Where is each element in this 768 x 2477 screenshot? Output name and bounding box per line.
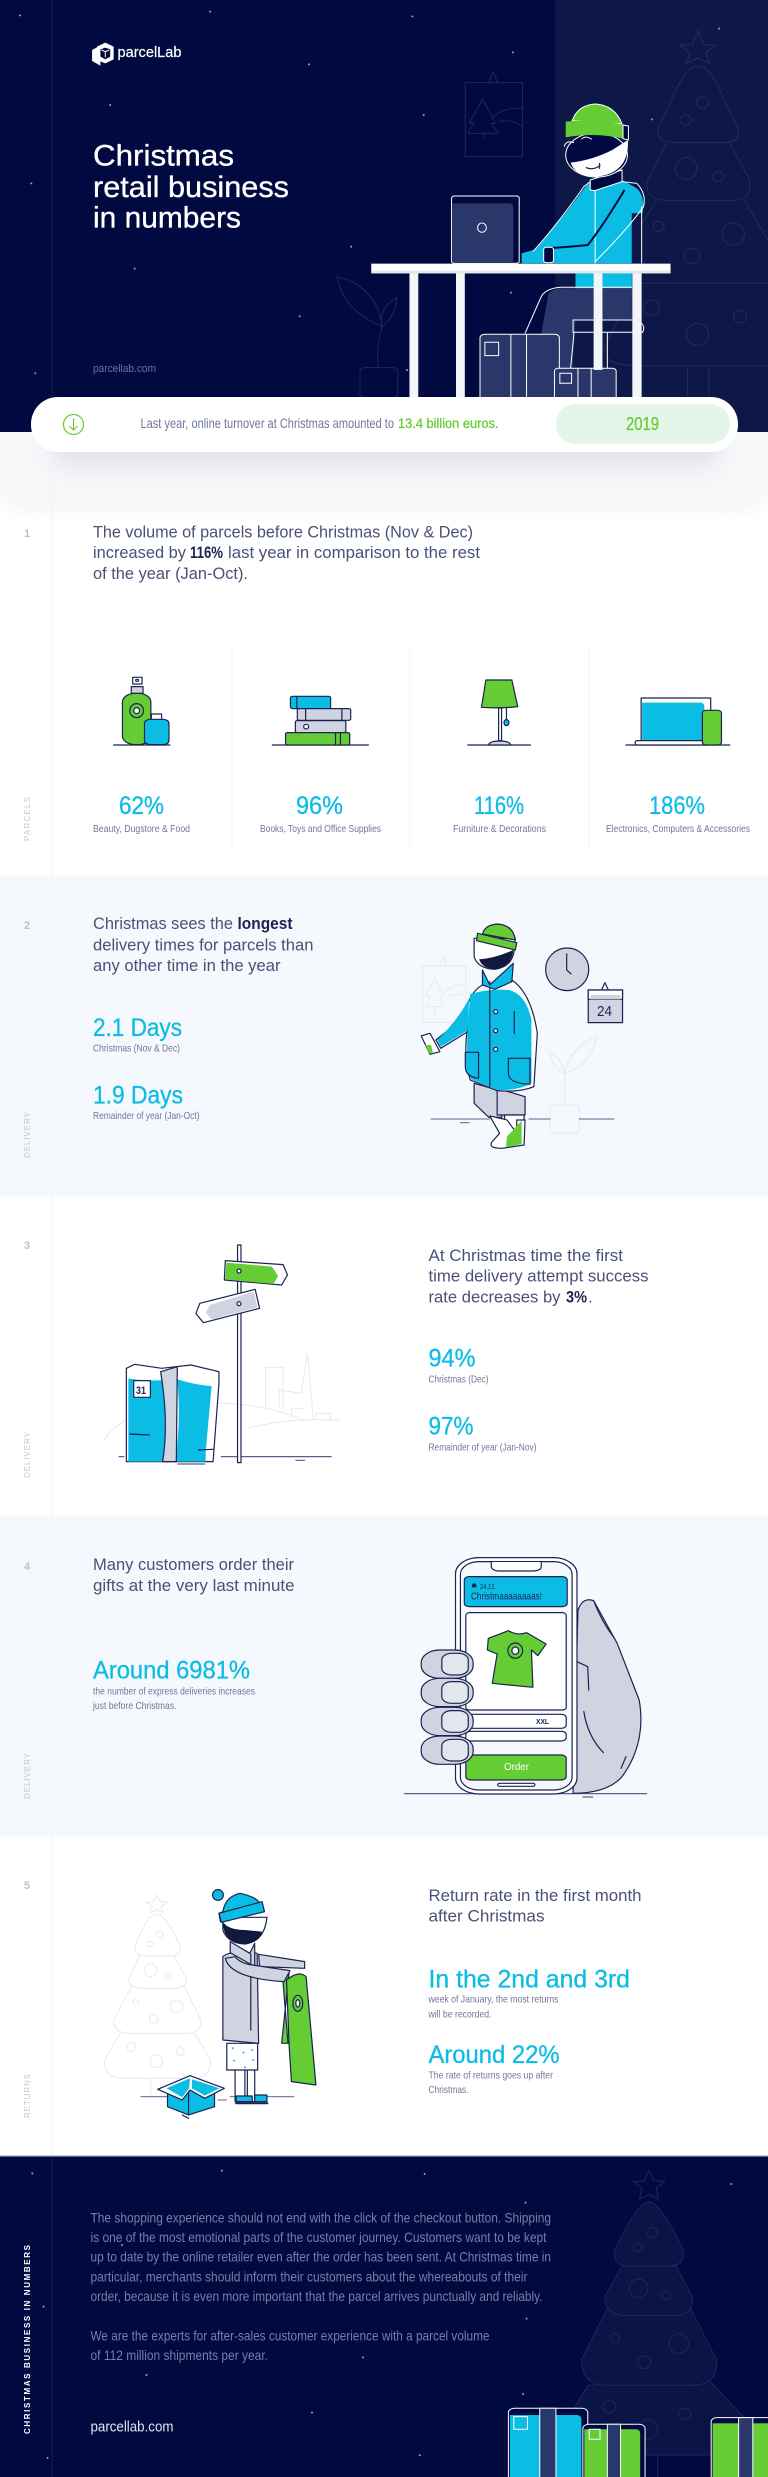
stat: electronics (606, 698, 750, 835)
pill shadow (0, 432, 768, 505)
clock (546, 948, 589, 991)
stat: 1.9 days: 1.9 Days (93, 1082, 183, 1110)
stat: books: Books, Toys and Office Supplies (260, 823, 381, 835)
stat: 97%: 97% (428, 1412, 474, 1440)
stat: 97% (428, 1412, 536, 1454)
section 2 heading: longest (238, 914, 293, 933)
section 1 heading: The volume of parcels before Christmas (Nov & Dec) (93, 522, 473, 542)
panel: section 2 delivery times (0, 876, 768, 1196)
stat: 2nd and 3rd week: week of January, the most returns (428, 1994, 558, 2006)
section 2 heading: Christmas sees the (93, 914, 233, 933)
stat: 1.9 days: Remainder of year (Jan-Oct) (93, 1110, 200, 1122)
footer paragraph: particular, merchants should inform their customers about the whereabouts of their (90, 2268, 528, 2284)
panel: section 2 delivery times: 2 (24, 920, 30, 932)
illustration: man in coat (421, 924, 623, 1148)
section 4 heading (93, 1555, 294, 1595)
panel: section 3 delivery success: 3 (24, 1240, 30, 1252)
parcel date tag: 31 (136, 1385, 146, 1397)
icon: laptop and phone (626, 698, 730, 745)
section 1 heading (93, 522, 480, 583)
stat: books (260, 696, 381, 835)
stat: 22% (428, 2041, 560, 2096)
section 3 heading: rate decreases by (428, 1288, 561, 1306)
footer paragraph (90, 2210, 551, 2363)
hand (544, 247, 553, 263)
stat: books: 96% (296, 792, 343, 820)
stat: beauty (93, 677, 190, 835)
footer paragraph: of 112 million shipments per year. (90, 2347, 268, 2363)
open box (168, 2083, 215, 2115)
stat: 2nd and 3rd week: will be recorded. (428, 2008, 492, 2020)
section 3 side label: DELIVERY (23, 1431, 32, 1478)
footer website link: parcellab.com (90, 2418, 174, 2436)
table top (371, 264, 671, 273)
panel: section 4 last minute orders: 4 (24, 1561, 31, 1573)
logo (92, 43, 182, 66)
legs (235, 2068, 255, 2102)
stat: 6981%: Around 6981% (93, 1656, 250, 1684)
footer paragraph: is one of the most emotional parts of the customer journey. Customers want to be kept (90, 2229, 547, 2245)
stat: beauty: Beauty, Dugstore & Food (93, 823, 190, 835)
section 2 side label: DELIVERY (23, 1111, 32, 1158)
stat: furniture (453, 680, 546, 835)
website link: parcellab.com (93, 363, 156, 375)
footer parcels (508, 2408, 768, 2477)
background stars (19, 11, 720, 374)
section 1 heading: of the year (Jan-Oct). (93, 564, 248, 583)
stat: 22%: The rate of returns goes up after (428, 2070, 553, 2082)
footer side label: CHRISTMAS BUSINESS IN NUMBERS (23, 2244, 32, 2434)
year badge (556, 404, 730, 444)
icon: lamp (468, 680, 530, 745)
logo: parcelLab (118, 44, 182, 61)
stat: 6981%: just before Christmas. (92, 1700, 176, 1712)
info pill: 13.4 billion euros. (398, 415, 498, 431)
panel: section 5 returns: 5 (24, 1880, 30, 1892)
icon: down arrow (64, 414, 84, 434)
phone (421, 1033, 440, 1054)
title: Christmas (93, 140, 234, 172)
stat: furniture: Furniture & Decorations (453, 823, 546, 835)
stat: 94% (428, 1344, 488, 1386)
illustration: hand holding phone: XXL (536, 1719, 550, 1726)
head (223, 1917, 267, 1944)
section 3 heading: time delivery attempt success (428, 1266, 648, 1286)
illustration: hand holding phone (405, 1558, 647, 1797)
illustration: hand holding phone: Christmaaaaaaaas! (471, 1592, 542, 1602)
illustration: hand holding phone: 24.12. (480, 1584, 496, 1591)
section 1 heading: last year in comparison to the rest (228, 543, 480, 562)
illustration: hand holding phone: Order (504, 1762, 530, 1773)
footer paragraph: We are the experts for after-sales customer experience with a parcel volume (90, 2328, 490, 2344)
coat (223, 1952, 259, 2043)
panel: hero (0, 0, 768, 514)
panel: footer (0, 2155, 768, 2477)
stat: 1.9 days (93, 1082, 200, 1122)
panel: section 1 parcels: 1 (24, 528, 30, 540)
stat: 2.1 days: Christmas (Nov & Dec) (93, 1042, 180, 1054)
head (474, 938, 515, 969)
section 4 side label: DELIVERY (23, 1752, 32, 1799)
section 3 heading: 3% (566, 1288, 587, 1306)
footer paragraph: order, because it is even more important that the parcel arrives punctually and reliably. (90, 2288, 542, 2304)
calendar (601, 983, 608, 990)
faint plant (337, 277, 398, 398)
stat: 22%: Around 22% (428, 2041, 560, 2069)
legs (474, 1083, 502, 1117)
section 1 heading: 116% (190, 543, 223, 562)
head (566, 133, 627, 177)
title (93, 140, 289, 234)
stat: beauty: 62% (119, 792, 164, 820)
coat (436, 980, 537, 1091)
section 1 heading: increased by (93, 543, 186, 562)
illustration: person at desk (371, 104, 671, 401)
stat: 94%: Christmas (Dec) (428, 1374, 488, 1386)
title: retail business (93, 171, 289, 204)
parcels (480, 334, 559, 401)
footer christmas tree (553, 2171, 768, 2477)
jacket (522, 180, 643, 263)
stat: 2nd and 3rd week (428, 1966, 630, 2020)
footer stars (31, 2170, 732, 2459)
section 2 heading: delivery times for parcels than (93, 936, 314, 954)
illustration: signpost and parcel (104, 1245, 339, 1464)
garment (282, 1973, 289, 2043)
section 2 heading (93, 914, 314, 975)
laptop (452, 196, 519, 263)
info pill (31, 397, 738, 452)
section 4 heading: Many customers order their (93, 1555, 294, 1574)
section 3 heading (428, 1246, 648, 1306)
faint picture frame (465, 72, 523, 157)
section 5 heading: Return rate in the first month (428, 1886, 642, 1905)
stat: 2nd and 3rd week: In the 2nd and 3rd (428, 1966, 630, 1994)
info pill: Last year, online turnover at Christmas amounted to (140, 415, 394, 431)
section 5 heading: after Christmas (428, 1906, 544, 1926)
stat: electronics: 186% (649, 792, 705, 820)
section 5 heading (428, 1886, 642, 1926)
stat: 2.1 days: 2.1 Days (93, 1014, 182, 1042)
calendar date: 24 (597, 1003, 612, 1020)
panel: section 5 returns (23, 1880, 642, 2118)
faint christmas tree (605, 31, 768, 397)
stat: 6981% (92, 1656, 255, 1712)
table legs (409, 273, 418, 398)
panel: section 1 parcels (23, 522, 750, 852)
title: in numbers (93, 202, 241, 234)
section 4 heading: gifts at the very last minute (93, 1576, 294, 1595)
illustration: man with tree and box (104, 1890, 316, 2118)
stat: 94%: 94% (428, 1344, 476, 1372)
icon: books (272, 696, 368, 745)
stat: furniture: 116% (474, 792, 524, 820)
stat: 2.1 days (93, 1014, 182, 1054)
footer paragraph: The shopping experience should not end with the click of the checkout button. Shipping (90, 2210, 551, 2226)
panel: section 3 delivery success (23, 1240, 648, 1478)
section 5 side label: RETURNS (23, 2074, 32, 2118)
icon: bottles (114, 677, 170, 745)
section 3 heading: At Christmas time the first (428, 1246, 623, 1265)
footer paragraph: up to date by the online retailer even after the order has been sent. At Christmas time in (90, 2248, 551, 2264)
panel: section 4 last minute orders (0, 1516, 768, 1836)
trousers (531, 288, 632, 397)
year badge: 2019 (626, 414, 659, 434)
section 3 heading: . (588, 1288, 593, 1306)
stat: 6981%: the number of express deliveries increases (93, 1686, 255, 1698)
section 1 side label: PARCELS (23, 797, 32, 841)
stat: 22%: Christmas. (428, 2084, 468, 2096)
stat: 97%: Remainder of year (Jan-Nov) (428, 1442, 536, 1454)
section 2 heading: any other time in the year (93, 956, 281, 975)
